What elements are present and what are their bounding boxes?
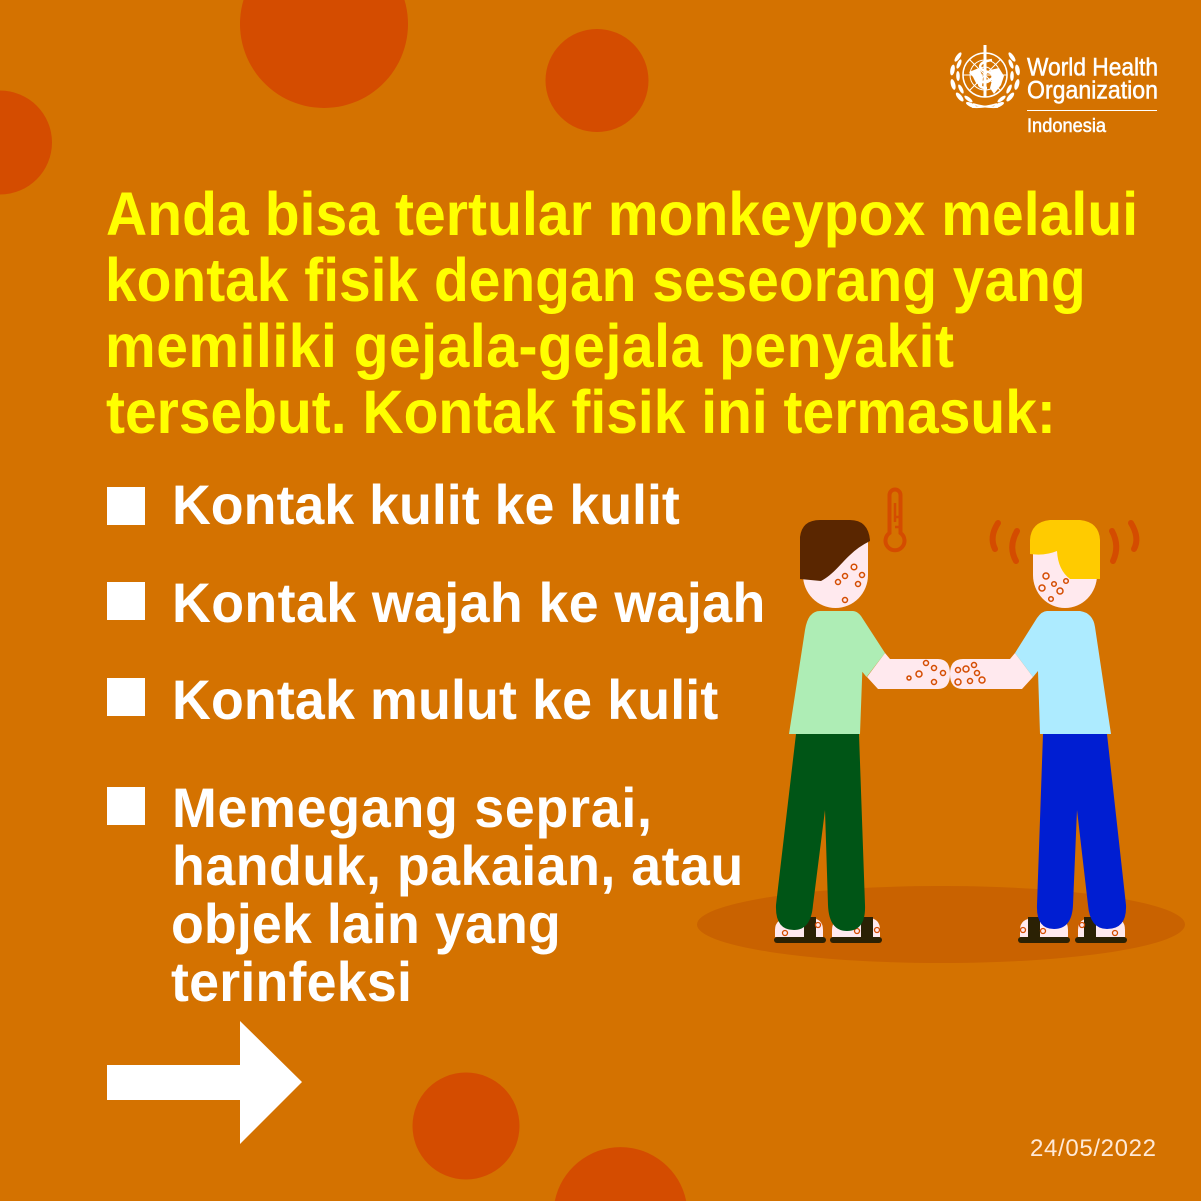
feet and sandals <box>774 917 882 943</box>
logo wordmark: Indonesia <box>1027 116 1106 137</box>
decorative circle bottom <box>412 1072 520 1180</box>
list item: mouth to skin: Kontak mulut ke kulit <box>172 668 718 731</box>
person with blond hair <box>950 520 1127 943</box>
list item: touching objects: Memegang seprai, <box>172 776 652 839</box>
title <box>105 180 1138 446</box>
head <box>803 540 868 608</box>
title: tersebut. Kontak fisik ini termasuk: <box>106 378 1056 446</box>
feet and sandals <box>1018 917 1127 943</box>
list item: face to face: Kontak wajah ke wajah <box>172 571 765 634</box>
WHO logo <box>949 45 1158 137</box>
list item: skin to skin: Kontak kulit ke kulit <box>172 473 680 536</box>
list item: touching objects: terinfeksi <box>171 950 412 1013</box>
decorative circle top middle <box>546 29 648 132</box>
title: kontak fisik dengan seseorang yang <box>105 246 1086 314</box>
skin spots <box>955 573 1068 685</box>
list item: touching objects: handuk, pakaian, atau <box>172 834 743 897</box>
arm <box>867 653 950 689</box>
arm <box>950 653 1033 689</box>
logo wordmark: World Health <box>1027 54 1158 82</box>
arrow <box>107 1021 302 1144</box>
illustration: two people bumping fists <box>774 490 1136 943</box>
list item: touching objects <box>107 776 743 1013</box>
title: Anda bisa tertular monkeypox melalui <box>106 180 1138 248</box>
icon: WHO emblem <box>949 45 1021 109</box>
decorative circle bottom right <box>555 1147 686 1201</box>
hair <box>1030 520 1100 579</box>
list of physical contact types <box>107 473 765 1013</box>
decorative circle left <box>0 90 52 194</box>
title: memiliki gejala-gejala penyakit <box>105 312 954 380</box>
list item: touching objects: objek lain yang <box>171 892 561 955</box>
icon: thermometer <box>886 490 905 550</box>
skin spots <box>836 564 946 684</box>
decorative circle top <box>240 0 408 108</box>
person with brown hair <box>774 520 950 943</box>
ground shadow <box>697 886 1185 963</box>
hair <box>800 520 870 581</box>
logo wordmark: Organization <box>1027 76 1158 104</box>
shirt <box>1015 611 1111 734</box>
trousers <box>1037 734 1126 929</box>
trousers <box>776 734 865 931</box>
icon: shivering lines <box>993 523 1136 561</box>
head <box>1033 545 1097 608</box>
shirt <box>789 611 885 734</box>
logo wordmark <box>1027 54 1158 137</box>
date: 24/05/2022 <box>1030 1135 1156 1162</box>
